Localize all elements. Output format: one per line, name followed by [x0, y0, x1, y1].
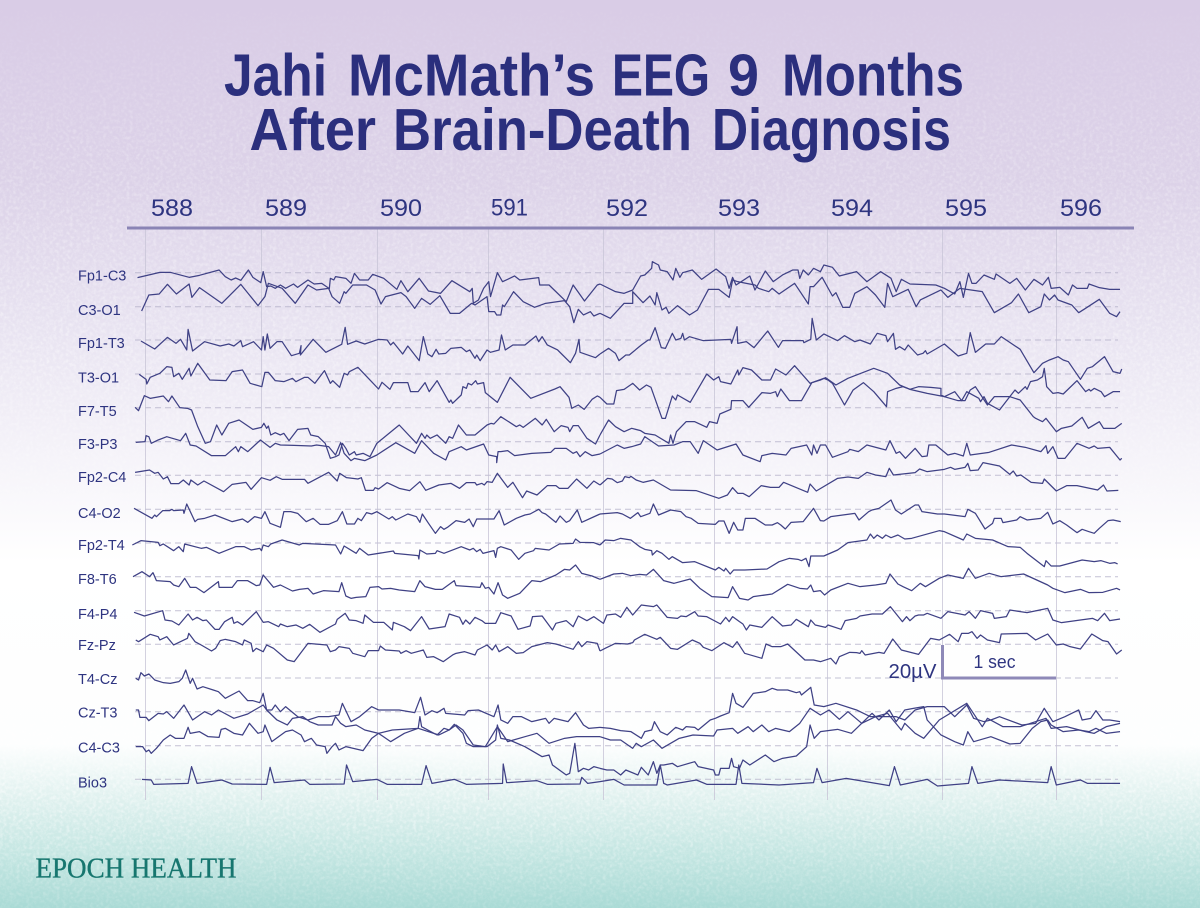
channel labels: Fp2-C4: [78, 470, 126, 486]
channel labels: F7-T5: [78, 404, 117, 420]
scale bar: [888, 645, 1056, 683]
trace: Bio3: [142, 764, 1120, 786]
title: McMath’s: [348, 42, 595, 108]
amplitude label: 20µV: [888, 661, 937, 683]
axis numbers: 592: [606, 195, 648, 222]
channel labels: Bio3: [78, 776, 107, 792]
trace: F7-T5: [135, 368, 1120, 458]
axis numbers: 593: [718, 195, 760, 222]
trace: Fp2-C4: [135, 463, 1118, 498]
title: EEG: [612, 42, 710, 108]
channel labels: F4-P4: [78, 607, 118, 623]
title: Jahi: [224, 42, 327, 108]
axis numbers: 596: [1060, 195, 1102, 222]
axis numbers: 595: [945, 195, 987, 222]
title: [224, 42, 964, 163]
channel labels: Cz-T3: [78, 706, 117, 722]
channel labels: Fz-Pz: [78, 638, 116, 654]
axis numbers: 589: [265, 195, 307, 222]
trace: F8-T6: [133, 565, 1120, 600]
trace: Fp2-T4: [132, 531, 1118, 574]
axis numbers: 591: [491, 194, 528, 222]
gridlines: [135, 228, 1118, 800]
axis numbers: 594: [831, 195, 873, 222]
time label: 1 sec: [974, 652, 1016, 672]
trace: T3-O1: [139, 363, 1122, 432]
axis numbers: [151, 194, 1102, 222]
trace: F3-P3: [136, 433, 1122, 463]
trace: C3-O1: [142, 277, 1120, 323]
channel labels: T4-Cz: [78, 672, 117, 688]
axis numbers: 590: [380, 195, 422, 222]
axis numbers: 588: [151, 195, 193, 222]
trace: Fp1-C3: [137, 262, 1120, 303]
logo: Epoch Health: EPOCH HEALTH: [36, 852, 237, 884]
title: Months: [782, 42, 964, 108]
trace: C4-C3: [136, 707, 1120, 775]
channel labels: Fp1-T3: [78, 336, 125, 352]
trace: C4-O2: [134, 500, 1121, 533]
channel labels: T3-O1: [78, 370, 119, 386]
EEG traces: [132, 262, 1122, 786]
axis line: [127, 226, 1134, 230]
trace: Fz-Pz: [136, 632, 1122, 664]
scale bracket: [942, 645, 1056, 678]
trace: T4-Cz: [136, 670, 1120, 748]
channel labels: [78, 268, 126, 792]
title: Brain-Death: [393, 97, 692, 163]
trace: F4-P4: [134, 605, 1120, 632]
channel labels: C4-C3: [78, 740, 120, 756]
time axis: [127, 194, 1134, 230]
trace: Cz-T3: [136, 687, 1120, 738]
trace: Fp1-T3: [141, 318, 1122, 379]
channel labels: Fp2-T4: [78, 538, 125, 554]
channel labels: F8-T6: [78, 572, 117, 588]
channel labels: C3-O1: [78, 303, 121, 319]
channel labels: F3-P3: [78, 437, 118, 453]
channel labels: C4-O2: [78, 506, 121, 522]
title: After: [250, 97, 376, 163]
title: 9: [728, 42, 759, 108]
title: Diagnosis: [712, 97, 951, 163]
channel labels: Fp1-C3: [78, 268, 126, 284]
